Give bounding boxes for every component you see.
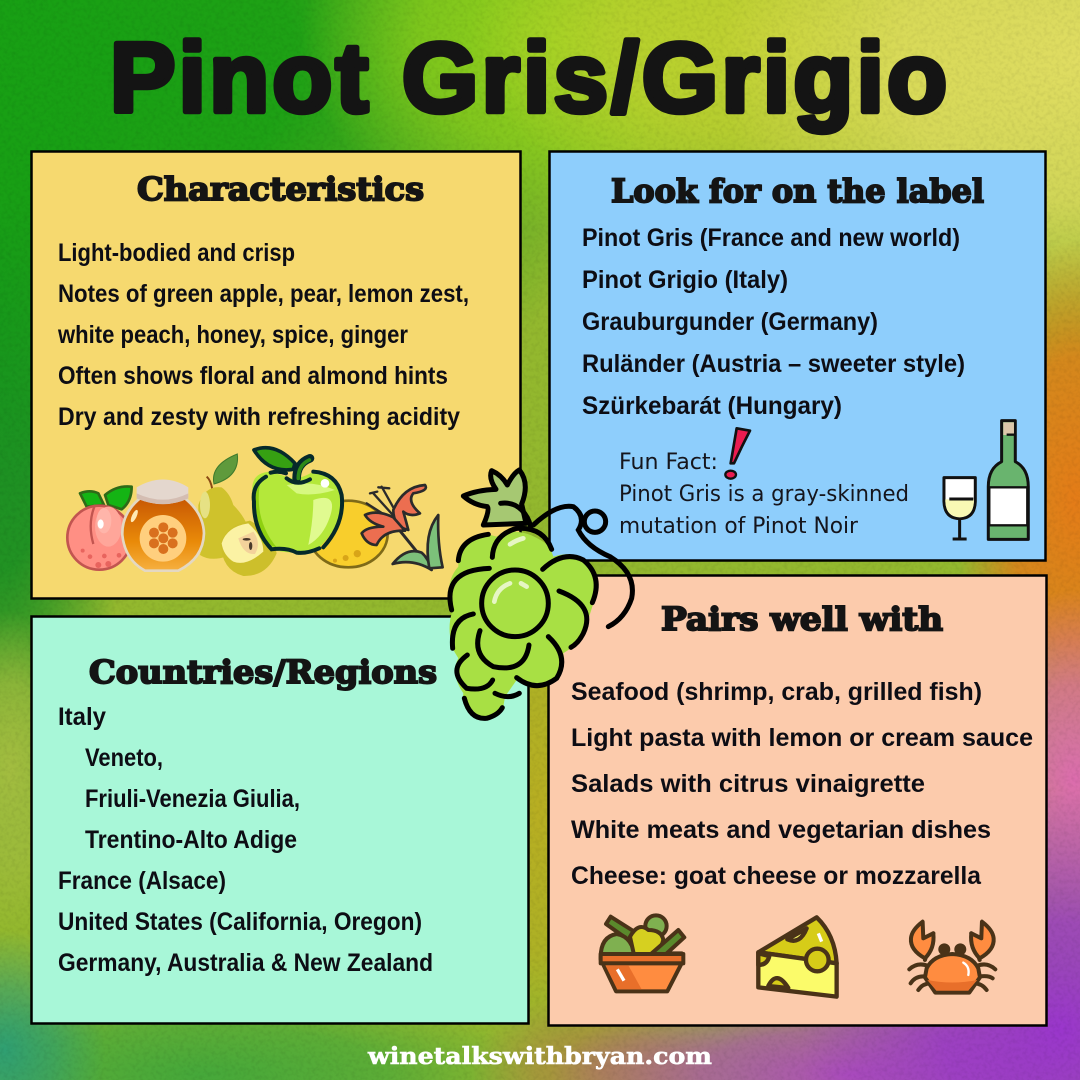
characteristics list: Notes of green apple, pear, lemon zest, [58,280,469,308]
fun fact: mutation of Pinot Noir [619,514,859,539]
pairings list [571,678,1033,890]
grape outlines [450,506,632,718]
characteristics list: white peach, honey, spice, ginger [57,321,408,349]
pairings list: Cheese: goat cheese or mozzarella [571,862,982,890]
label names list: Szürkebarát (Hungary) [582,392,842,420]
regions list: Trentino-Alto Adige [85,826,297,854]
characteristics list: Dry and zesty with refreshing acidity [58,403,460,431]
icon: peach [67,486,132,570]
heading: look for on the label: Look for on the label [611,172,984,210]
panel: pairs well with [548,576,1046,1026]
title: Pinot Gris/Grigio [110,22,947,132]
icon: exclamation mark [725,428,750,479]
website footer: winetalkswithbryan.com [367,1043,712,1070]
label names list: Pinot Gris (France and new world) [582,224,960,252]
panel: look for on the label [550,152,1046,560]
icon: honey jar [122,479,204,571]
regions list: France (Alsace) [58,867,226,895]
regions list: Germany, Australia & New Zealand [58,949,433,977]
label names list: Grauburgunder (Germany) [582,308,878,336]
icon: pear [198,454,277,576]
fun fact [619,450,909,539]
grape fill [449,532,596,716]
label names list: Ruländer (Austria – sweeter style) [582,350,965,378]
regions list: Italy [58,703,106,731]
icon: cheese wedge [758,917,837,997]
icon: salad bowl [601,915,684,991]
pairings list: White meats and vegetarian dishes [571,816,991,844]
pairings list: Light pasta with lemon or cream sauce [571,724,1033,752]
characteristics list: Light-bodied and crisp [58,239,295,267]
icon: flower [362,485,443,570]
icon: green grape bunch [449,470,632,718]
icon: lemon [309,501,388,567]
icon: crab [909,922,995,993]
icon: green apple [252,448,342,553]
fun fact: Fun Fact: [619,450,718,475]
label names list [582,224,965,420]
icon: wine glass and bottle [944,421,1028,539]
fun fact: Pinot Gris is a gray-skinned [619,482,909,507]
regions list: Veneto, [85,744,163,772]
characteristics list [57,239,469,431]
pairings list: Salads with citrus vinaigrette [571,770,925,798]
regions list [58,703,433,977]
panel: countries and regions [32,616,528,1024]
grape leaf [463,470,526,525]
characteristics list: Often shows floral and almond hints [58,362,448,390]
icon: fruits, honey and flower [67,448,443,576]
heading: pairs well with: Pairs well with [661,600,943,638]
regions list: Friuli-Venezia Giulia, [85,785,300,813]
heading: countries and regions: Countries/Regions [89,653,437,691]
pairings list: Seafood (shrimp, crab, grilled fish) [571,678,982,706]
regions list: United States (California, Oregon) [58,908,422,936]
label names list: Pinot Grigio (Italy) [582,266,788,294]
panel: characteristics [32,152,520,598]
heading: characteristics: Characteristics [137,170,424,208]
grape highlights [494,538,527,602]
